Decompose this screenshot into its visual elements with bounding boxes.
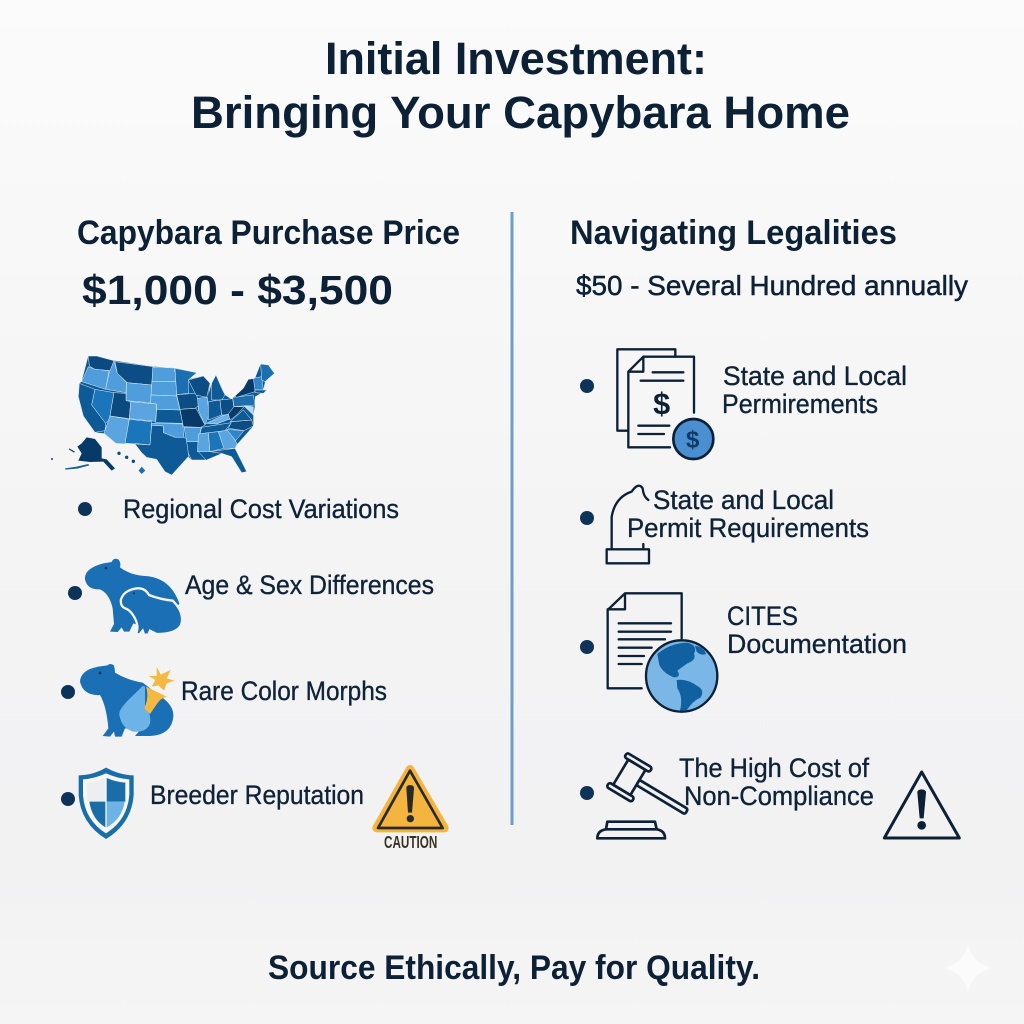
icon: sparkle xyxy=(944,943,992,993)
label: permit requirements: State and Local xyxy=(653,485,834,515)
label: CITES documentation: CITES xyxy=(727,601,798,631)
icon: shield xyxy=(79,768,134,839)
label: non-compliance: The High Cost of xyxy=(679,753,869,783)
label: non-compliance xyxy=(679,753,874,811)
bullet: age and sex xyxy=(68,586,82,600)
heading: legalities: Navigating Legalities xyxy=(570,214,897,252)
icon: caution sign: CAUTION xyxy=(384,832,437,852)
bullet: regional cost xyxy=(78,502,92,516)
label: rare color: Rare Color Morphs xyxy=(181,676,387,706)
panel: capybara purchase price xyxy=(51,214,460,852)
icon: US map xyxy=(51,356,274,475)
heading: purchase price: Capybara Purchase Price xyxy=(77,214,460,252)
panel: navigating legalities xyxy=(570,214,968,838)
closing statement: Source Ethically, Pay for Quality. xyxy=(268,949,760,987)
label: state and local permirements xyxy=(722,361,907,419)
bullet: CITES xyxy=(580,640,594,654)
icon: gavel xyxy=(597,753,697,838)
label: CITES documentation: Documentation xyxy=(727,629,907,659)
label: age and sex: Age & Sex Differences xyxy=(185,570,434,600)
icon: documents with dollar coin xyxy=(617,349,713,459)
bullet: permit requirements xyxy=(580,511,594,525)
label: state and local permirements: State and Local xyxy=(723,361,907,391)
icon: caution sign xyxy=(377,769,444,852)
icon: documents with dollar coin: $ xyxy=(653,387,670,421)
title xyxy=(191,33,850,138)
icon: document and globe xyxy=(608,593,717,712)
label: permit requirements xyxy=(627,485,869,543)
icon: adult and young capybara xyxy=(85,559,182,635)
bullet: permits cost xyxy=(580,379,594,393)
icon: warning triangle xyxy=(884,772,959,838)
label: breeder: Breeder Reputation xyxy=(150,780,364,810)
title: Bringing Your Capybara Home xyxy=(191,87,850,138)
bullet: rare color xyxy=(61,685,75,699)
icon: rare color capybara xyxy=(80,664,175,737)
icon: documents with dollar coin: $ xyxy=(686,427,699,454)
label: regional cost: Regional Cost Variations xyxy=(123,494,399,524)
label: non-compliance: Non-Compliance xyxy=(684,781,874,811)
label: CITES documentation xyxy=(727,601,907,659)
label: state and local permirements: Permirements xyxy=(722,389,878,419)
divider between columns xyxy=(510,212,514,825)
title: Initial Investment: xyxy=(325,33,707,84)
label: permit requirements: Permit Requirements xyxy=(627,513,869,543)
price range: $1,000 - $3,500 xyxy=(82,267,393,313)
bullet: breeder xyxy=(61,792,75,806)
bullet: non-compliance xyxy=(580,786,594,800)
icon: permit stamp xyxy=(607,486,649,563)
annual cost: $50 - Several Hundred annually xyxy=(576,270,968,301)
